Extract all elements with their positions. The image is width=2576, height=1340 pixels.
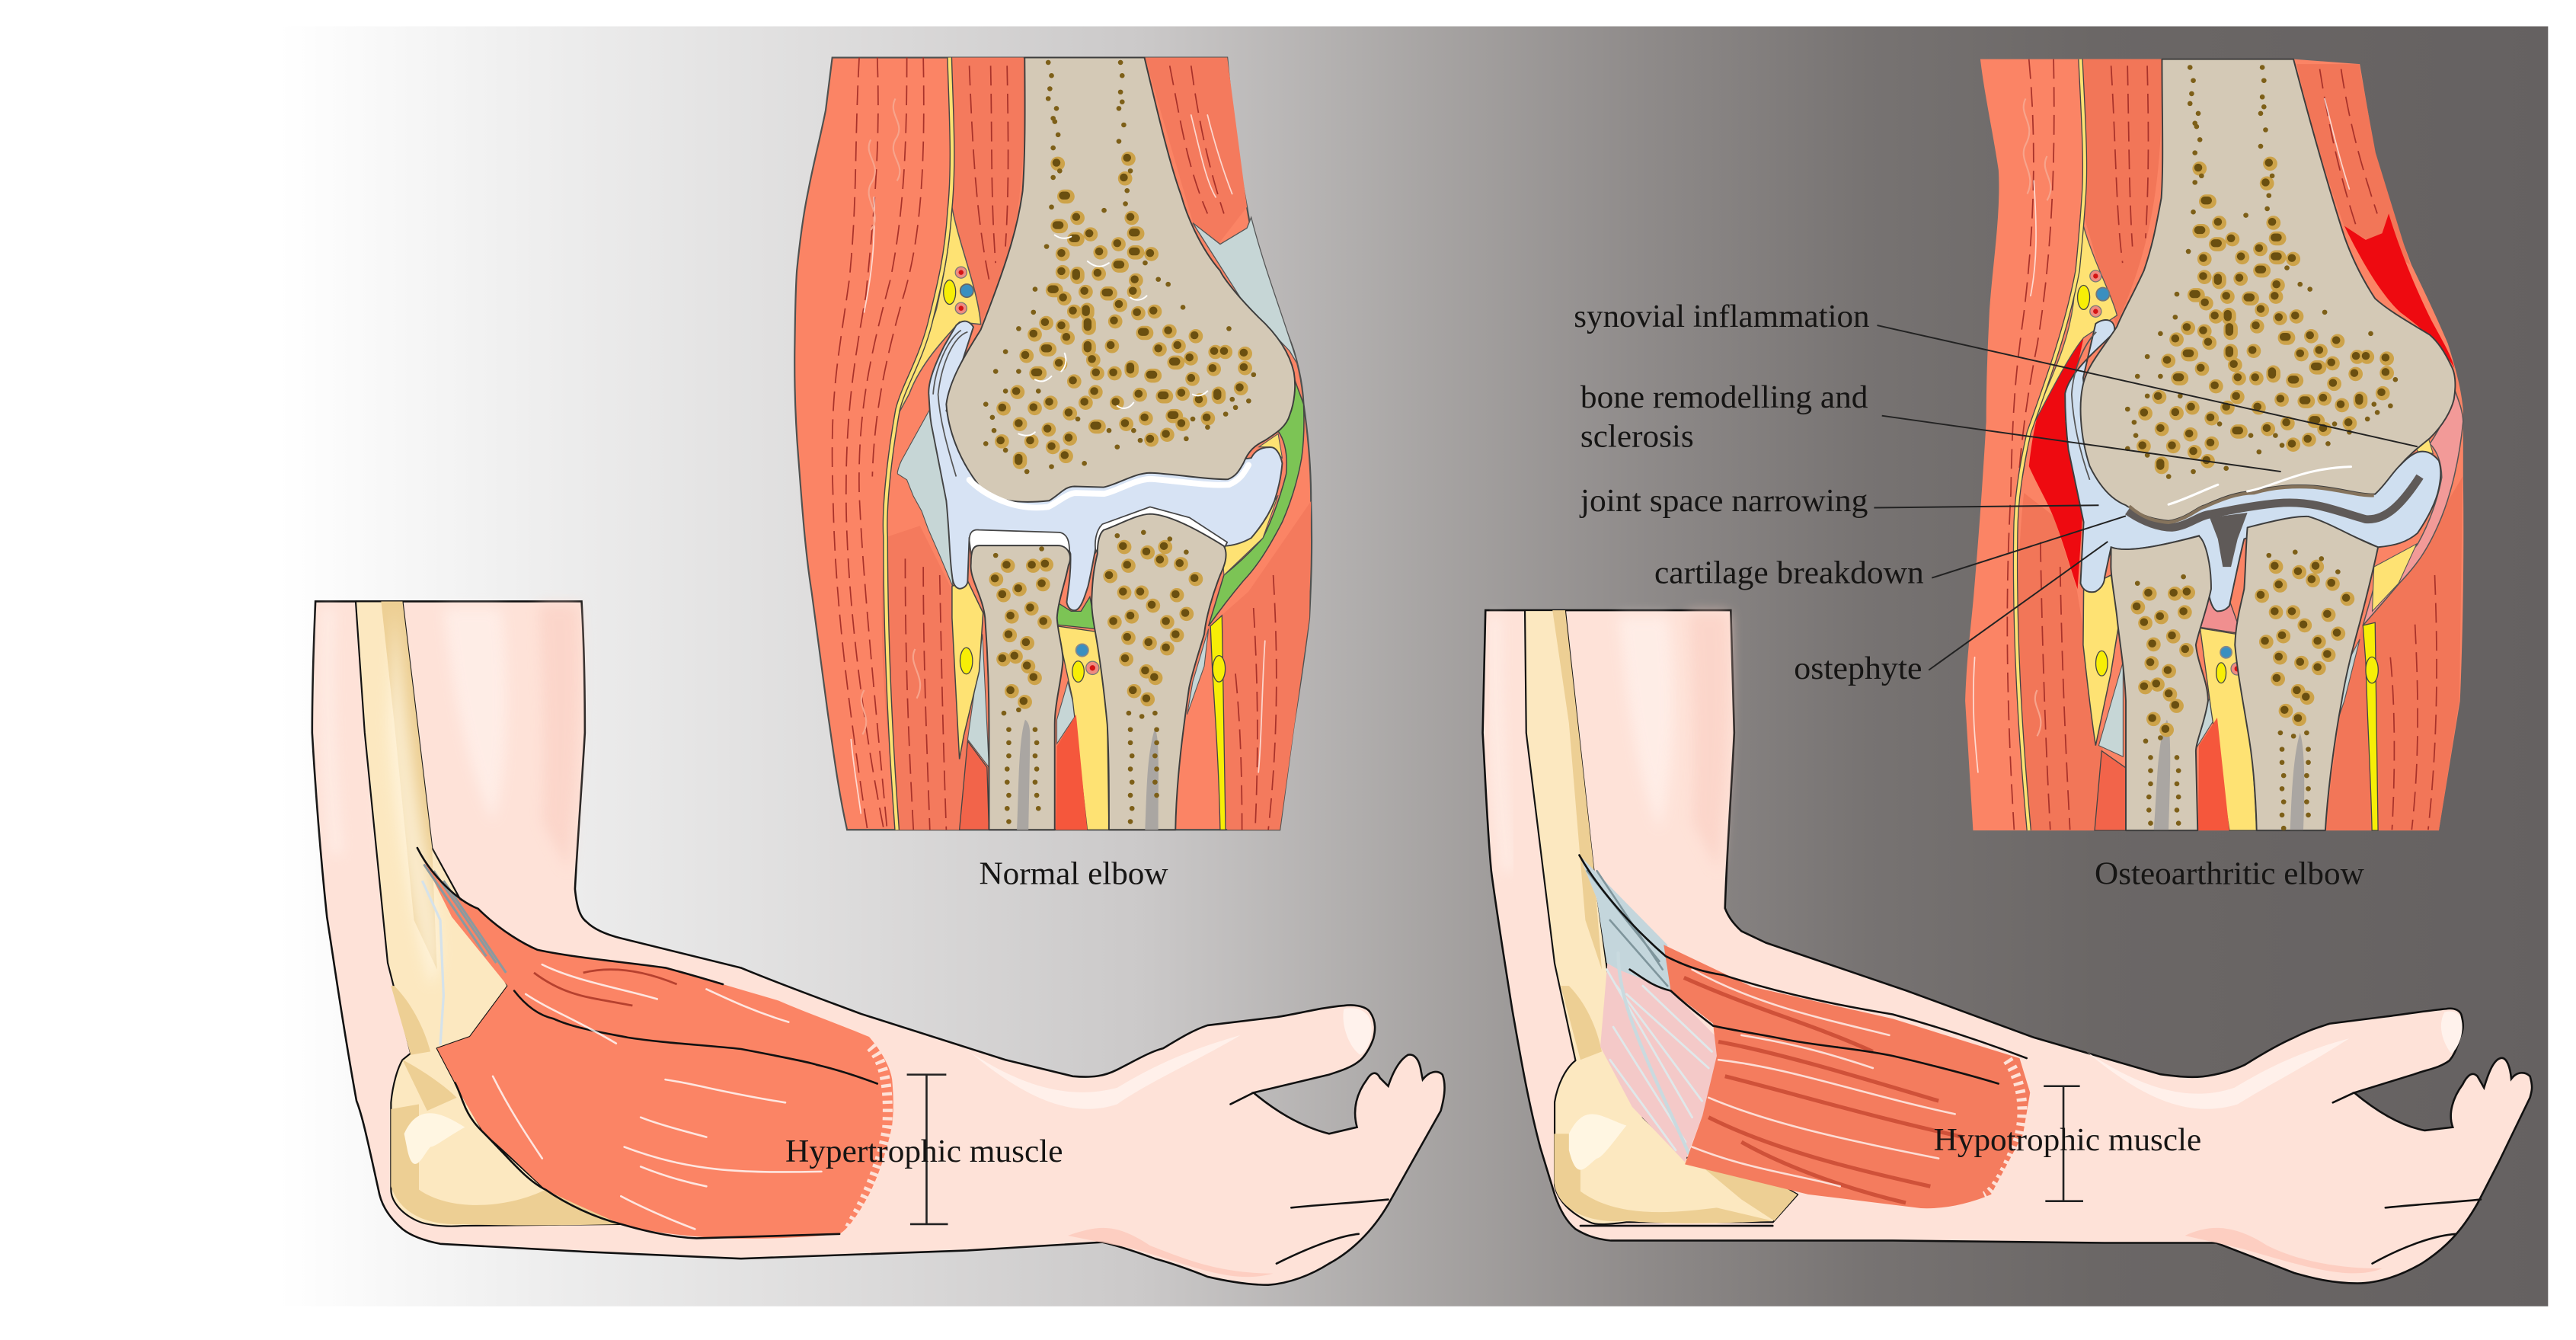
ulna marrow cavity bbox=[1145, 728, 1159, 830]
central pink ligament bbox=[2199, 589, 2242, 634]
muscle silhouette bbox=[794, 58, 1312, 830]
bone highlight bbox=[404, 1113, 465, 1164]
ulna cartilage bbox=[1095, 507, 1227, 552]
yellow fat right bbox=[1222, 433, 1282, 575]
fat pad lower left bbox=[2083, 575, 2120, 746]
bracket: hypertrophic muscle width bbox=[907, 1075, 948, 1224]
humerus bbox=[946, 58, 1295, 502]
skin light patches bbox=[1495, 616, 1508, 871]
fat pad lower left bbox=[952, 580, 983, 760]
label: bone remodelling and sclerosis: bone remodelling and bbox=[1580, 380, 1868, 415]
radius marrow cavity bbox=[2154, 720, 2170, 830]
right nerve bbox=[2363, 622, 2378, 830]
right nerve bbox=[1210, 616, 1226, 830]
muscle lower inner bbox=[2095, 751, 2126, 830]
muscle stippled end bbox=[848, 1047, 887, 1231]
central green ligament bbox=[1055, 596, 1096, 628]
radius bbox=[2111, 536, 2211, 830]
central vessels bbox=[2216, 647, 2243, 683]
hand creases bbox=[2333, 1092, 2481, 1264]
capsule inner fold bbox=[2072, 332, 2096, 480]
humerus cartilage bbox=[970, 465, 1248, 507]
ligament striations bbox=[1587, 871, 1711, 1153]
central fat bbox=[2200, 628, 2257, 830]
muscle outlines bbox=[1579, 855, 2027, 1226]
leader lines for osteoarthritis labels bbox=[1874, 325, 2418, 670]
central vessels bbox=[1072, 644, 1099, 682]
ligament upper right bbox=[1193, 217, 1298, 365]
panel: osteoarthritic elbow cross-section bbox=[1965, 59, 2463, 849]
pale ligament and wasted fibres bbox=[1579, 855, 1717, 1162]
muscle dark fibres bbox=[534, 970, 677, 1006]
inflamed red synovium left bbox=[2029, 337, 2084, 589]
muscle stippled end bbox=[1985, 1060, 2022, 1196]
panel: hypotrophic forearm bbox=[1483, 610, 2532, 1284]
caption: osteoarthritic elbow: Osteoarthritic elbow bbox=[2095, 856, 2364, 891]
ligament left bbox=[897, 405, 953, 587]
nerve left lower bbox=[960, 648, 973, 674]
thumb nail bbox=[1343, 1008, 1372, 1055]
label: bone remodelling and sclerosis: sclerosis bbox=[1580, 420, 1694, 455]
humerus bbox=[2081, 59, 2456, 521]
lower ligaments bbox=[967, 628, 1209, 767]
ligament upper tendon bbox=[1579, 855, 1671, 991]
humerus tide mark bbox=[2129, 487, 2374, 523]
muscle bbox=[1664, 945, 2030, 1208]
skin light patches bbox=[328, 608, 388, 855]
yellow fat upper bbox=[2022, 215, 2117, 478]
nerve and vessels upper bbox=[944, 267, 973, 314]
muscle highlights bbox=[493, 964, 821, 1229]
radius cartilage bbox=[970, 529, 1069, 565]
darker muscle groups bbox=[882, 58, 1311, 830]
pink inflamed ligament bbox=[2363, 388, 2463, 625]
nerve line bbox=[2015, 59, 2085, 830]
skin silhouette bbox=[1483, 610, 2532, 1284]
caption: normal elbow: Normal elbow bbox=[980, 856, 1168, 891]
fat pad upper bbox=[898, 206, 981, 415]
muscle fibres dark bbox=[1684, 977, 1963, 1203]
narrowed joint space bbox=[2127, 477, 2420, 527]
muscle fibre lines bbox=[1974, 59, 2437, 830]
thumb nail bbox=[2441, 1012, 2463, 1054]
ulna bbox=[2235, 516, 2378, 830]
ulna spongy bone bbox=[1109, 532, 1196, 821]
joint debris patch bbox=[2210, 513, 2248, 567]
ulna marrow cavity bbox=[2290, 733, 2304, 830]
green ligament right bbox=[1209, 373, 1304, 626]
yellow fat right bbox=[2373, 437, 2433, 611]
synovial joint capsule bbox=[928, 321, 1282, 610]
label: joint space narrowing: joint space narrowing bbox=[1579, 484, 1868, 519]
muscle extensor bbox=[417, 848, 893, 1239]
tendon lines bbox=[423, 865, 506, 973]
label: cartilage breakdown: cartilage breakdown bbox=[1654, 556, 1924, 591]
nerve line bbox=[885, 58, 952, 830]
muscle fibres light bbox=[1692, 970, 1955, 1186]
radius marrow cavity bbox=[1017, 720, 1030, 830]
nerve lower left bbox=[2096, 651, 2108, 676]
inflamed red synovium upper right bbox=[2344, 213, 2454, 368]
label: hypotrophic muscle: Hypotrophic muscle bbox=[1934, 1123, 2201, 1158]
ulna bbox=[1091, 514, 1226, 830]
label: hypertrophic muscle: Hypertrophic muscle bbox=[785, 1134, 1063, 1169]
darker muscle groups bbox=[2018, 59, 2463, 830]
subchondral sclerosis bbox=[2169, 467, 2351, 504]
bone strip bbox=[356, 601, 621, 1226]
hand creases bbox=[1231, 1092, 1389, 1264]
radius spongy bone bbox=[995, 548, 1047, 821]
bone shading bbox=[1552, 610, 1798, 1223]
muscle outlines bbox=[417, 848, 877, 1238]
radius bbox=[971, 545, 1070, 830]
lower ligaments bbox=[2098, 639, 2360, 756]
nerve and vessels upper bbox=[2078, 270, 2109, 317]
muscle lower inner bbox=[960, 741, 989, 830]
central muscle bbox=[2198, 718, 2229, 830]
muscle fibre lines bbox=[833, 58, 1277, 830]
panel: hypertrophic forearm bbox=[312, 601, 1445, 1285]
capsule inner folds bbox=[933, 331, 967, 477]
central muscle bbox=[1056, 715, 1087, 830]
skin silhouette bbox=[312, 601, 1445, 1285]
bone strip bbox=[1525, 610, 1798, 1224]
panel: normal elbow cross-section bbox=[794, 58, 1312, 830]
label: synovial inflammation: synovial inflammation bbox=[1574, 299, 1870, 334]
humerus spongy bone bbox=[2127, 67, 2395, 477]
bone shading bbox=[381, 601, 621, 1226]
humerus spongy bone bbox=[986, 62, 1254, 472]
bracket: hypotrophic muscle width bbox=[2044, 1086, 2083, 1201]
central fat bbox=[1057, 626, 1109, 830]
synovial joint capsule bbox=[2065, 320, 2440, 611]
ulna spongy bone bbox=[2261, 552, 2347, 841]
muscle silhouette bbox=[1965, 59, 2463, 830]
radius spongy bone bbox=[2137, 577, 2188, 849]
bone highlight bbox=[1569, 1114, 1626, 1170]
label: ostephyte: ostephyte bbox=[1794, 651, 1922, 686]
